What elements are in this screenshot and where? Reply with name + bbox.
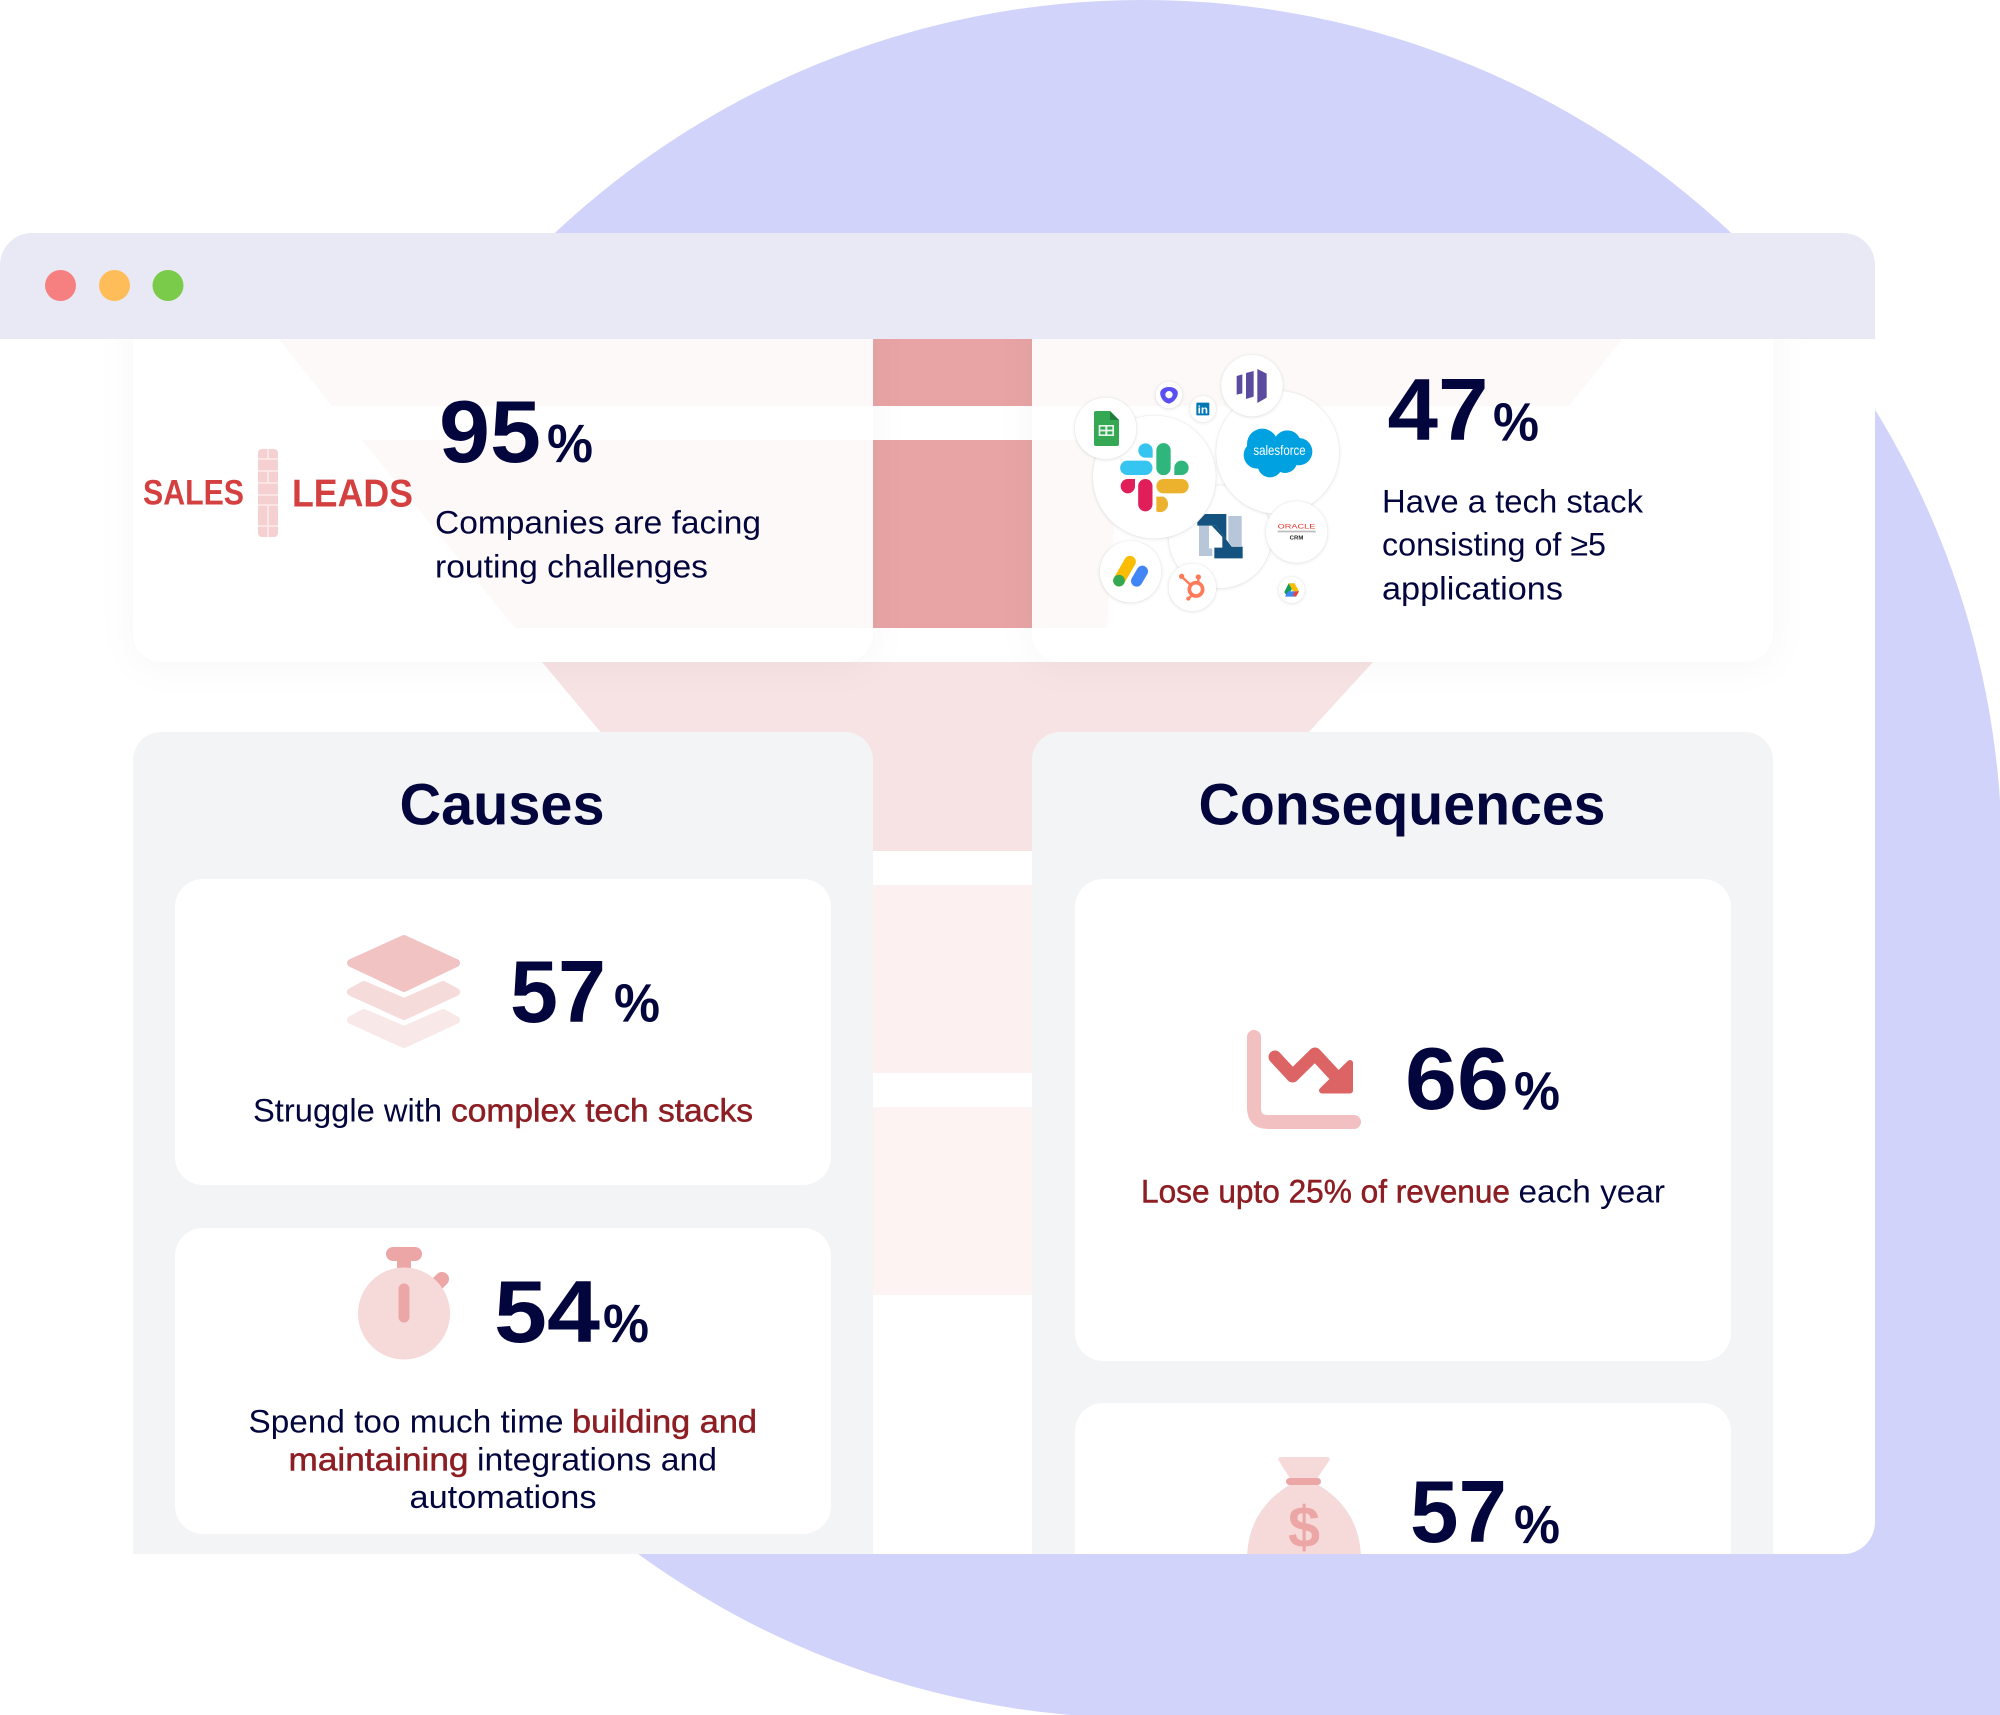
funnel band 3: [542, 662, 1373, 851]
browser window: [0, 233, 1875, 1554]
heading: causes: Causes: [400, 772, 604, 838]
description: integrations: Spend too much time: [248, 1404, 564, 1440]
panel background: [1032, 732, 1773, 1632]
icon: money bag: $: [1288, 1495, 1320, 1560]
window body: [0, 233, 1875, 1554]
description: integrations: building and: [572, 1404, 757, 1440]
description: tech stack: [1382, 484, 1644, 606]
description: complex tech stacks: [253, 1092, 753, 1128]
linkedin bubble: [1190, 396, 1216, 422]
cause card: complex tech stacks: [175, 879, 831, 1185]
icon: money bag: [1247, 1457, 1361, 1600]
panel: causes: [133, 732, 873, 1632]
oracle crm bubble: CRM: [1290, 536, 1304, 542]
google sheets bubble: [1075, 397, 1137, 459]
stat 57%: [510, 942, 660, 1041]
close button: [45, 270, 76, 301]
icon: stopwatch: [358, 1247, 450, 1360]
icon: declining chart: [1254, 1037, 1354, 1122]
stat 57%: %: [1514, 1495, 1560, 1555]
stat 66%: %: [1514, 1062, 1560, 1122]
panel: consequences: [1032, 732, 1773, 1703]
funnel band 1: [873, 339, 1032, 406]
linkedin bubble: in: [1198, 405, 1208, 417]
description: complex tech stacks: Struggle with: [253, 1092, 442, 1128]
stat 95%: [442, 400, 592, 463]
description: integrations: maintaining: [288, 1442, 468, 1478]
logo: sales wall leads: [143, 449, 413, 537]
faint funnel band top: [279, 339, 873, 406]
minimize button: [99, 270, 130, 301]
icon: stacked layers: [351, 939, 456, 1044]
slack bubble: [1093, 415, 1216, 539]
stat 66%: 66: [1405, 1029, 1509, 1128]
consequence card: revenue loss: [1075, 879, 1731, 1361]
funnel band 4: [873, 885, 1032, 1073]
salesforce bubble: [1216, 391, 1339, 514]
description: tech stack: Have a tech stack: [1382, 484, 1644, 520]
stat 47%: 47: [1388, 360, 1488, 459]
stat 57%: [1410, 1462, 1560, 1561]
card background: [1032, 290, 1773, 662]
stat 66%: [1405, 1029, 1560, 1128]
heading: consequences: Consequences: [1198, 772, 1606, 838]
outreach bubble: [1155, 381, 1183, 409]
netsuite bubble: [1168, 485, 1272, 588]
description: integrations: automations: [410, 1479, 596, 1515]
stat 54%: 54: [494, 1262, 600, 1361]
description: routing challenges: [435, 504, 761, 584]
maximize button: [152, 270, 184, 301]
stat 54%: %: [603, 1294, 649, 1354]
google drive bubble: [1278, 577, 1305, 603]
description: revenue: each year: [1518, 1174, 1665, 1210]
oracle crm bubble: ORACLE: [1278, 524, 1315, 531]
description: tech stack: consisting of ≥5: [1382, 526, 1606, 562]
stat 57%: 57: [1410, 1462, 1507, 1561]
stat 57%: %: [614, 974, 660, 1034]
description: integrations: integrations and: [477, 1442, 717, 1478]
description: revenue: Lose upto 25% of revenue: [1141, 1174, 1510, 1210]
panel background: [133, 732, 873, 1632]
google ads bubble: [1100, 541, 1162, 603]
faint funnel band middle: [1032, 440, 1120, 628]
card background: [133, 290, 873, 662]
logo cluster: [1075, 355, 1339, 611]
window title bar: [0, 233, 1875, 339]
funnel: [542, 339, 1373, 1295]
hubspot bubble: [1168, 563, 1216, 611]
description: routing challenges: routing challenges: [435, 548, 708, 584]
title bar background: [0, 233, 1875, 339]
sales word: SALES: [143, 474, 244, 512]
faint funnel band top: [1032, 339, 1622, 406]
cause card: integrations and automations: [175, 1228, 831, 1534]
consequence card: money bag: [1075, 1403, 1731, 1703]
description: integrations: [248, 1404, 757, 1515]
stat 95%: %: [547, 414, 593, 474]
stat 95%: 95: [439, 382, 541, 481]
marketo bubble: [1221, 355, 1283, 417]
top card: tech stack: [1074, 353, 1643, 612]
stat 57%: 57: [510, 942, 606, 1041]
stat 47%: [1388, 379, 1538, 441]
description: routing challenges: Companies are facing: [435, 504, 761, 540]
description: complex tech stacks: complex tech stacks: [451, 1092, 753, 1128]
brick wall: [258, 449, 278, 537]
top card: sales leads: [144, 400, 759, 584]
stat 54%: [494, 1262, 649, 1361]
leads word: LEADS: [292, 472, 413, 516]
salesforce bubble: salesforce: [1253, 442, 1306, 458]
funnel band 5: [873, 1107, 1032, 1295]
stat 47%: %: [1493, 392, 1539, 452]
window content: [133, 339, 1773, 1554]
funnel band 2: [873, 440, 1032, 628]
description: tech stack: applications: [1382, 570, 1563, 606]
faint funnel band middle: [362, 440, 873, 628]
oracle crm bubble: [1266, 501, 1328, 563]
